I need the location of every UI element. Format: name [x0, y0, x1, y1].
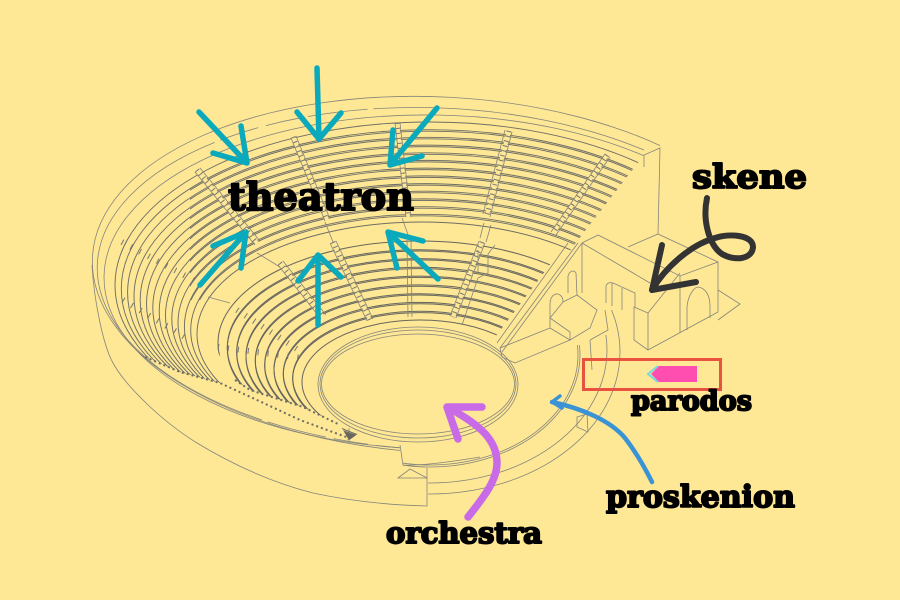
label: parodos: parodos — [631, 386, 752, 417]
arrow: upper right — [390, 108, 437, 165]
lower tier seating rows — [218, 240, 550, 440]
outer rim and wall — [92, 96, 660, 506]
icon: cyan chevron — [648, 366, 658, 382]
skene building — [497, 148, 740, 370]
label: theatron: theatron — [228, 174, 414, 219]
upper tier seating rows — [114, 122, 638, 440]
theatre line drawing — [92, 96, 740, 506]
icon: pink arrow tag — [651, 366, 697, 382]
arrow: upper left — [199, 112, 247, 163]
arrow: lower left — [200, 232, 246, 285]
infographic canvas — [92, 65, 806, 544]
parodos marker box — [584, 360, 720, 390]
radial aisles — [122, 123, 610, 358]
label: proskenion: proskenion — [606, 480, 795, 515]
arrow: lower right — [388, 232, 438, 279]
proskenion rings — [403, 310, 620, 494]
arrow: lower centre — [298, 255, 341, 325]
arrow: skene looped — [652, 198, 753, 290]
orchestra circle — [318, 327, 518, 442]
arrow: proskenion — [552, 396, 652, 482]
small block on ring — [577, 414, 588, 432]
label: skene: skene — [692, 157, 807, 196]
arrow: upper centre — [297, 68, 341, 139]
teal arrows pointing to theatron — [199, 68, 438, 325]
seat row end lines — [145, 357, 349, 438]
label: orchestra: orchestra — [386, 516, 542, 550]
arrow: orchestra — [447, 407, 497, 517]
